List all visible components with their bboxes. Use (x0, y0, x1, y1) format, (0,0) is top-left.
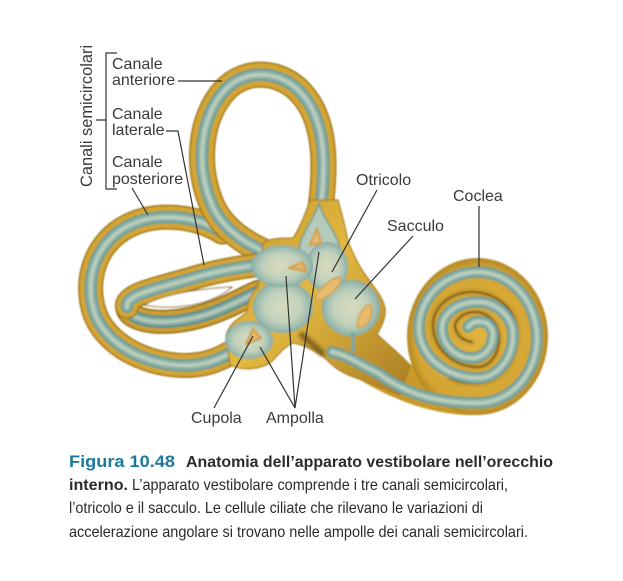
cochlea gold body (340, 258, 548, 415)
caption bold lead-in: interno. (69, 477, 128, 494)
leader: cupola (214, 336, 253, 408)
leaders: ampolla (260, 252, 319, 408)
illustration: inner ear labyrinth (91, 75, 548, 415)
leader: laterale (166, 131, 204, 265)
label: Coclea: Coclea (453, 188, 503, 205)
posterior ampulla (225, 321, 273, 359)
caption line 3: l’otricolo e il sacculo. Le cellule ciliate che rilevano le variazioni di (69, 500, 483, 517)
saccule (322, 280, 380, 336)
leader: posteriore (132, 188, 148, 215)
caption title: Anatomia dell’apparato vestibolare nell’orecchio (186, 454, 553, 471)
leader: anteriore (178, 80, 222, 82)
vestibule body (226, 200, 410, 395)
label: Cupola: Cupola (191, 410, 242, 427)
lateral canal upper arm and ampulla (127, 245, 313, 307)
posterior semicircular canal (91, 217, 252, 365)
anterior ampulla (299, 203, 340, 272)
utricle (306, 242, 348, 292)
dark fold in vestibule (302, 335, 322, 353)
leader: otricolo (332, 190, 377, 272)
label: Canale posteriore: Canale (112, 154, 163, 171)
lower vestibular chamber (253, 281, 313, 333)
label: Canale anteriore: Canale (112, 56, 163, 73)
lateral canal lower arm (127, 292, 258, 322)
bracket: canali semicircolari (96, 53, 117, 189)
cochlear spiral duct (332, 272, 537, 403)
saccule stem to cochlear duct (351, 334, 355, 350)
cupolas and maculae (246, 229, 372, 344)
label: Otricolo: Otricolo (356, 172, 411, 189)
label: Canale laterale: laterale (112, 122, 165, 139)
lateral canal inner hole (144, 287, 232, 307)
label: Canale posteriore: posteriore (112, 171, 183, 188)
label: Canale anteriore: anteriore (112, 72, 175, 89)
label: Canale laterale: Canale (112, 106, 163, 123)
caption figure number: Figura 10.48 (69, 452, 175, 471)
caption (69, 452, 553, 541)
leader: sacculo (355, 236, 413, 299)
leader: coclea (478, 206, 480, 267)
caption line 4: accelerazione angolare si trovano nelle ampolle dei canali semicircolari. (69, 524, 528, 541)
label: Sacculo: Sacculo (387, 218, 444, 235)
label: Ampolla: Ampolla (266, 410, 324, 427)
anterior semicircular canal (202, 75, 323, 254)
label: Canali semicircolari: Canali semicircolari (78, 45, 96, 187)
caption line 2: L’apparato vestibolare comprende i tre canali semicircolari, (132, 477, 508, 494)
